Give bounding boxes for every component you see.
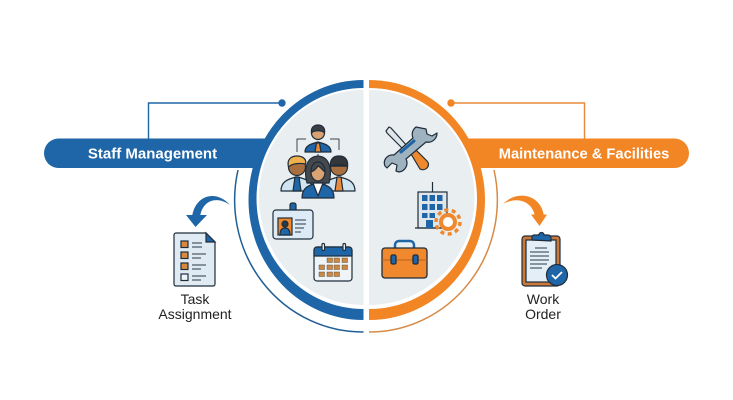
screwdriver: [386, 127, 428, 170]
icon: calendar: [314, 244, 352, 281]
connector: blue: [148, 99, 286, 138]
top person: [305, 125, 331, 152]
left person: [281, 156, 313, 191]
outer thin arc: orange: [369, 170, 497, 332]
icon: toolbox: [382, 241, 427, 278]
icon: building with gear: [415, 182, 460, 234]
left half circle: [248, 80, 364, 320]
label: Task Assignment: Assignment: [158, 306, 232, 322]
gear: [436, 210, 460, 234]
right person: [323, 156, 355, 191]
icon: team org chart: [281, 125, 355, 198]
icon: work order clipboard: [522, 232, 568, 286]
icon: wrench and screwdriver: [384, 127, 437, 172]
label: Work Order: Work: [527, 291, 560, 307]
icon: ID badge: [273, 203, 313, 239]
arrow: to Task Assignment: [186, 196, 230, 227]
outer thin arc: blue: [235, 170, 364, 332]
arrow: to Work Order: [503, 196, 547, 226]
label: Staff Management: Staff Management: [88, 146, 217, 162]
icon: task checklist: [174, 233, 215, 286]
connector: orange: [447, 99, 584, 138]
center person: [302, 156, 334, 198]
label: Work Order: Order: [525, 306, 561, 322]
right half circle: [369, 80, 485, 320]
label: Task Assignment: Task: [181, 291, 210, 307]
wrench: [384, 127, 437, 172]
pill: Maintenance & Facilities: [450, 138, 689, 168]
label: Maintenance & Facilities: Maintenance & Facilities: [499, 146, 669, 162]
pill: Staff Management: [44, 138, 284, 168]
